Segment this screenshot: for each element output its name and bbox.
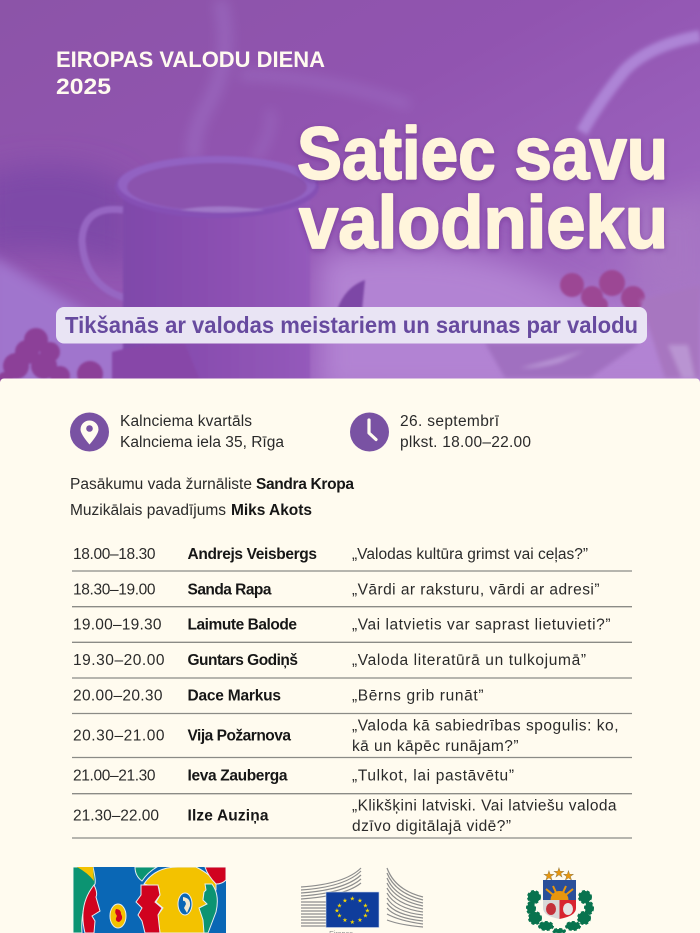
EU flag: ★ [350, 896, 355, 902]
EU flag: ★ [342, 917, 348, 924]
date and time text: 26. septembrī [400, 413, 500, 430]
location text: Kalnciema iela 35, Rīga [120, 434, 284, 451]
icon: mug [82, 156, 319, 385]
oak leaves [527, 891, 593, 933]
row 7: Ieva Zauberga [188, 768, 288, 784]
host and music credits: Muzikālais pavadījums [70, 502, 226, 519]
row 5: Dace Markus [188, 688, 281, 704]
host and music credits: Miks Akots [231, 502, 312, 519]
panel: details [0, 378, 700, 933]
shield [543, 880, 576, 922]
EU flag: ★ [357, 898, 363, 904]
row 8: Ilze Auziņa [188, 808, 269, 824]
row 1 [73, 546, 588, 563]
EU flag: ★ [342, 898, 348, 904]
building, left wing [301, 868, 361, 926]
row 6: Vija Požarnova [188, 728, 291, 744]
row 8: dzīvo digitālajā vidē?” [352, 818, 511, 835]
EU flag: ★ [334, 908, 340, 914]
EU flag: ★ [365, 908, 370, 914]
row 8 [73, 798, 617, 835]
row 1: Andrejs Veisbergs [188, 546, 317, 563]
row 2 [73, 582, 600, 598]
location text [120, 413, 284, 451]
row 3: „Vai latvietis var saprast lietuvieti?” [352, 616, 610, 634]
row 2: 18.30–19.00 [73, 582, 156, 598]
logo: European Day of Languages [73, 867, 226, 933]
schedule table [72, 546, 632, 838]
row 5 [73, 688, 484, 704]
host and music credits: Pasākumu vada žurnāliste [70, 476, 252, 493]
logo: coat of arms of Latvia [527, 865, 593, 933]
host and music credits [70, 476, 354, 519]
row 4: 19.30–20.00 [73, 652, 165, 669]
stars: ★ [563, 868, 574, 883]
row 4 [73, 652, 586, 669]
icon: location pin [70, 412, 109, 452]
EU flag: ★ [337, 912, 342, 920]
row 3: Laimute Balode [188, 616, 297, 634]
row 3: 19.00–19.30 [73, 616, 162, 634]
stars: ★ [553, 865, 565, 880]
icon: clock [350, 412, 389, 452]
row 6: 20.30–21.00 [73, 728, 165, 744]
row 4: „Valoda literatūrā un tulkojumā” [352, 652, 586, 669]
row 5: „Bērns grib runāt” [352, 688, 484, 704]
EU flag: ★ [363, 902, 368, 910]
row 7: 21.00–21.30 [73, 768, 156, 784]
stars [543, 865, 574, 883]
row 6: kā un kāpēc runājam?” [352, 738, 518, 755]
subtitle pill: Tikšanās ar valodas meistariem un sarunas par valodu [65, 312, 638, 338]
eyebrow heading: EIROPAS VALODU DIENA [56, 47, 325, 72]
title: valodnieku [299, 181, 668, 264]
row 2: „Vārdi ar raksturu, vārdi ar adresi” [352, 582, 600, 598]
row 2: Sanda Rapa [188, 582, 272, 598]
row 5: 20.00–20.30 [73, 688, 163, 704]
EU flag: ★ [337, 902, 342, 910]
date and time text [400, 413, 531, 451]
eyebrow heading [56, 52, 324, 94]
EU flag: ★ [363, 912, 368, 920]
row 6 [73, 718, 618, 755]
eyebrow heading: 2025 [56, 74, 111, 99]
row 6: „Valoda kā sabiedrības spogulis: ko, [352, 718, 618, 734]
host and music credits: Sandra Kropa [256, 476, 354, 493]
row 1: „Valodas kultūra grimst vai ceļas?” [352, 546, 588, 563]
title [297, 112, 668, 264]
title: Satiec savu [297, 112, 668, 195]
EU flag [326, 892, 379, 928]
row 7 [73, 768, 514, 784]
hero background: purple-tinted photo of a steaming mug [0, 0, 700, 395]
building, right wing [387, 868, 423, 927]
row 8: 21.30–22.00 [73, 808, 159, 824]
row 8: „Klikšķini latviski. Vai latviešu valoda [352, 798, 617, 814]
stars: ★ [543, 868, 555, 883]
berries and leaves [0, 270, 645, 388]
location text: Kalnciema kvartāls [120, 413, 252, 430]
logo: European Commission [301, 868, 423, 933]
EU flag: ★ [350, 919, 355, 926]
row 1: 18.00–18.30 [73, 546, 156, 563]
steam [194, 0, 410, 160]
row 4: Guntars Godiņš [188, 652, 298, 669]
row 7: „Tulkot, lai pastāvētu” [352, 768, 514, 784]
subtitle pill [56, 307, 647, 344]
date and time text: plkst. 18.00–22.00 [400, 434, 531, 451]
row 3 [73, 616, 610, 634]
EU flag: ★ [357, 917, 363, 924]
